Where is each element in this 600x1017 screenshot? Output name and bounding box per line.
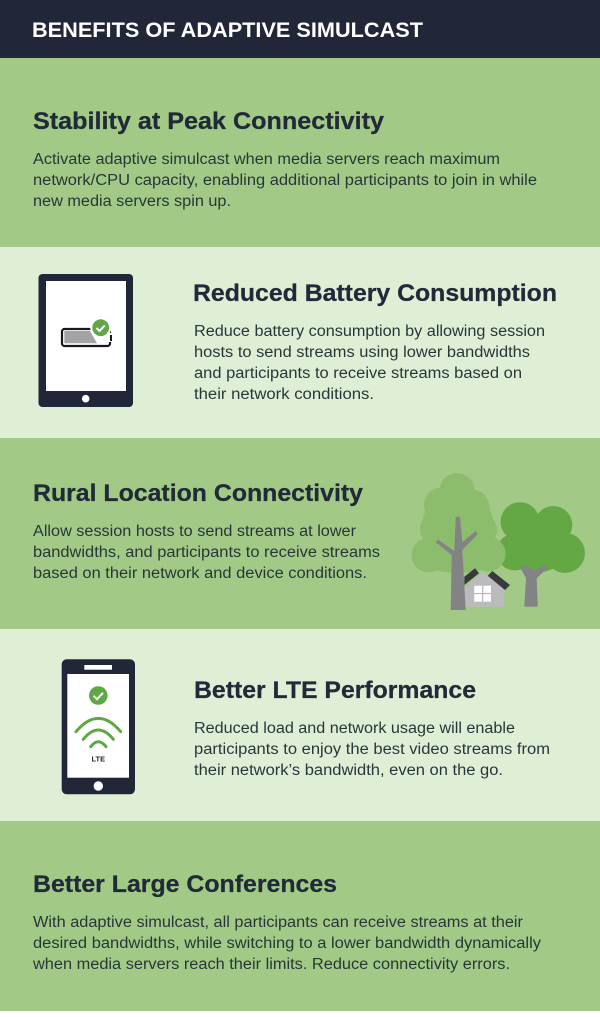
heading: rural: Rural Location Connectivity xyxy=(33,480,363,507)
panel: better LTE performance xyxy=(0,629,600,821)
text block: stability xyxy=(33,151,537,210)
icon: trees and house xyxy=(412,473,585,610)
text block: conferences: With adaptive simulcast, all participants can receive streams at their xyxy=(33,914,523,931)
text block: LTE xyxy=(194,720,550,779)
heading: stability: Stability at Peak Connectivity xyxy=(33,108,384,135)
text block: LTE: participants to enjoy the best video streams from xyxy=(194,741,550,758)
text block: battery: hosts to send streams using lower bandwidths xyxy=(194,344,530,361)
icon: phone with LTE signal: LTE xyxy=(91,754,105,764)
icon: tablet with battery xyxy=(38,274,133,407)
text block: battery: and participants to receive streams based on xyxy=(194,365,522,382)
text block: LTE: Reduced load and network usage will enable xyxy=(194,720,515,737)
text block: rural xyxy=(33,523,380,582)
text block: battery: their network conditions. xyxy=(194,386,374,403)
header banner xyxy=(0,0,600,58)
panel: rural location connectivity xyxy=(0,438,600,629)
text block: stability: new media servers spin up. xyxy=(33,193,231,210)
panel: reduced battery consumption xyxy=(0,247,600,438)
text block: stability: network/CPU capacity, enabling additional participants to join in while xyxy=(33,172,537,189)
text block: LTE: their network’s bandwidth, even on the go. xyxy=(194,762,503,779)
text block: conferences: when media servers reach their limits. Reduce connectivity errors. xyxy=(32,956,510,973)
heading: LTE: Better LTE Performance xyxy=(194,677,476,704)
panel: stability at peak connectivity xyxy=(0,58,600,247)
text block: battery: Reduce battery consumption by allowing session xyxy=(194,323,545,340)
icon: phone with LTE signal xyxy=(62,659,135,794)
text block: stability: Activate adaptive simulcast when media servers reach maximum xyxy=(33,151,500,168)
text block: rural: Allow session hosts to send streams at lower xyxy=(33,523,356,540)
text block: battery xyxy=(194,323,545,403)
text block: rural: bandwidths, and participants to receive streams xyxy=(33,544,380,561)
text block: conferences: desired bandwidths, while switching to a lower bandwidth dynamically xyxy=(33,935,541,952)
heading: conferences: Better Large Conferences xyxy=(33,871,337,898)
title: BENEFITS OF ADAPTIVE SIMULCAST xyxy=(32,18,423,42)
text block: rural: based on their network and device conditions. xyxy=(33,565,367,582)
panel: better large conferences xyxy=(0,821,600,1011)
heading: battery: Reduced Battery Consumption xyxy=(193,280,557,307)
text block: conferences xyxy=(32,914,541,973)
